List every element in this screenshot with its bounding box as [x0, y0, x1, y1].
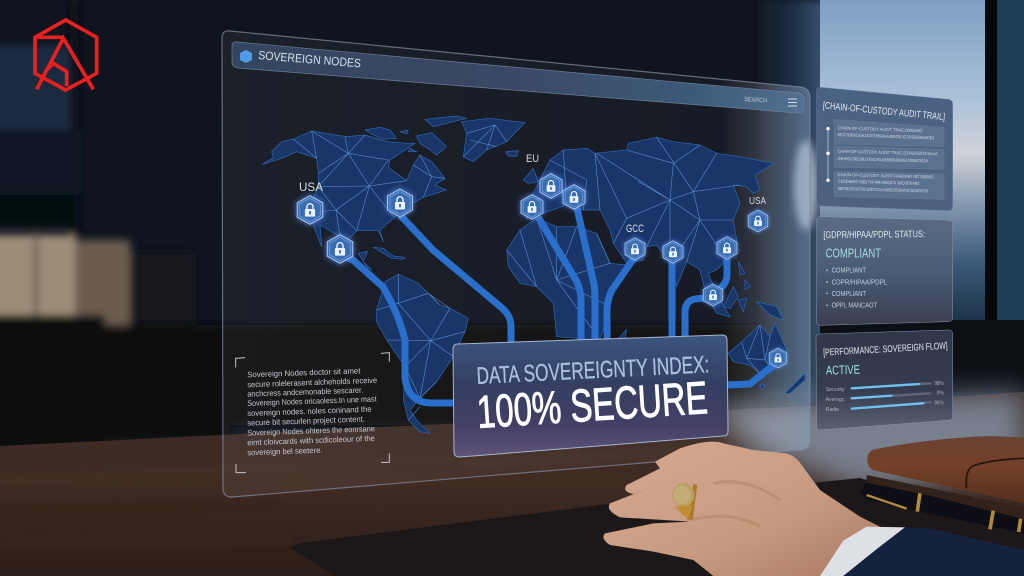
bar chart: 96% — [934, 400, 944, 406]
text block with corner brackets: secure bit securlen project content. — [247, 415, 365, 428]
label: EU: EU — [526, 153, 539, 165]
bar chart: 0% — [937, 391, 944, 397]
audit row 2 — [834, 146, 944, 169]
panel title: [CHAIN-OF-CUSTODY AUDIT TRAIL] — [822, 100, 946, 123]
text block with corner brackets: Sovereign Nodes ohteres the eonrsane — [247, 424, 375, 438]
text block with corner brackets — [236, 353, 389, 473]
icon: menu — [788, 99, 797, 106]
hand — [603, 442, 1024, 576]
callout value: 100% SECURE — [475, 371, 709, 438]
search label: SEARCH — [744, 96, 768, 105]
callout: data sovereignty index — [453, 335, 728, 457]
status value: COMPLIANT — [826, 246, 881, 260]
callout label: DATA SOVEREIGNTY INDEX: — [476, 351, 710, 390]
audit row 3: C5DD8693-S8Q7VF4MA98QC5 38Q3D5A83 — [838, 179, 920, 186]
text block with corner brackets: sovereign nodes. noles coninand the — [247, 405, 372, 418]
status list: COMPLIANT — [832, 266, 866, 275]
performance title: [PERFORMANCE: SOVEREIGN FLOW] — [823, 341, 948, 359]
panel: compliance status — [817, 217, 953, 325]
text block with corner brackets: secure rolelerasent alcheholds receive — [247, 376, 378, 389]
node: EU north — [540, 173, 562, 199]
status list: OPPL MANCAOT — [832, 301, 877, 310]
connector pipes — [340, 208, 775, 403]
audit row 1 — [834, 119, 944, 147]
node: Australia — [769, 348, 787, 368]
audit row 2: CHAIN-OF-CUSTODY AUDIT TRAC:220A8D5D3C9AAA — [838, 149, 938, 156]
label: USA east: USA — [749, 196, 766, 207]
audit row 3: 68D5D3D3D78C83FDCUCN85D5D6AF3C5D8DCD5 — [838, 186, 929, 193]
text block with corner brackets: Sovereign Nodes doctor sit amet — [247, 366, 361, 379]
bar chart: Security — [826, 387, 845, 393]
suit sleeve — [843, 527, 1024, 576]
node: USA east — [387, 188, 413, 218]
label: USA: USA — [299, 182, 323, 194]
notebook strap — [966, 458, 1024, 488]
audit row 3 — [834, 171, 944, 199]
status list: COMPLIANT — [832, 289, 866, 298]
audit row 1: CHAIN-OF-CUSTODY AUDIT TRAC:0005A9G — [838, 125, 923, 133]
icon: header hexagon — [240, 50, 252, 63]
audit row 1: 8ECD8B8GGA2D37D958AA388DE3C3D55596A6063 — [838, 132, 935, 140]
header title: SOVEREIGN NODES — [258, 48, 362, 70]
text block with corner brackets: Sovereign Nodes oricaoless.tn une mast — [247, 394, 377, 408]
bar chart: 98% — [934, 381, 944, 387]
audit row 2: 03H55C0B228J7E5CFAA8B86598B5100080303A — [838, 156, 928, 163]
text block with corner brackets: eimt cloivcards with scdicoleour of the — [247, 434, 376, 447]
panel header bar — [232, 42, 804, 113]
ring — [672, 483, 697, 520]
label: GCC: GCC — [626, 223, 644, 235]
world map — [262, 116, 805, 433]
main glass panel — [222, 31, 810, 497]
shirt cuff — [820, 527, 905, 576]
node: Southeast Asia — [703, 283, 723, 307]
node: USA west — [297, 195, 323, 225]
audit row 3: CHAIN-OF-CUSTODY AUDIT R4AD982-0D7669E5 — [838, 172, 934, 180]
status list — [826, 266, 887, 310]
performance status: ACTIVE — [826, 363, 860, 378]
bar chart — [826, 381, 944, 413]
node: India — [663, 240, 683, 264]
panel: performance — [816, 330, 953, 430]
node: USA south — [327, 234, 353, 264]
logo — [35, 20, 97, 90]
bar chart: Aversgc — [826, 397, 845, 403]
map: australia — [728, 323, 805, 393]
status title: [GDPR/HIPAA/PDPL STATUS: — [823, 229, 925, 241]
map: africa and eurasia — [507, 137, 783, 340]
node: EU east — [563, 184, 585, 210]
map: north america — [262, 116, 525, 270]
notebook — [867, 436, 1024, 520]
text block with corner brackets: sovereign bel seetere. — [247, 446, 323, 457]
node: EU west — [521, 194, 543, 220]
pen — [861, 483, 1024, 533]
map: south america — [377, 274, 468, 433]
node: East Asia — [717, 236, 737, 260]
timeline — [826, 127, 830, 182]
node: GCC — [625, 237, 645, 261]
status list: CDPR/HIPAA/PDPL — [832, 278, 887, 287]
bar chart: Radie — [826, 407, 839, 413]
text block with corner brackets: anchcress andcemonable sescarer. — [247, 386, 363, 399]
node: Japan — [748, 209, 768, 233]
panel: chain of custody — [817, 87, 953, 211]
